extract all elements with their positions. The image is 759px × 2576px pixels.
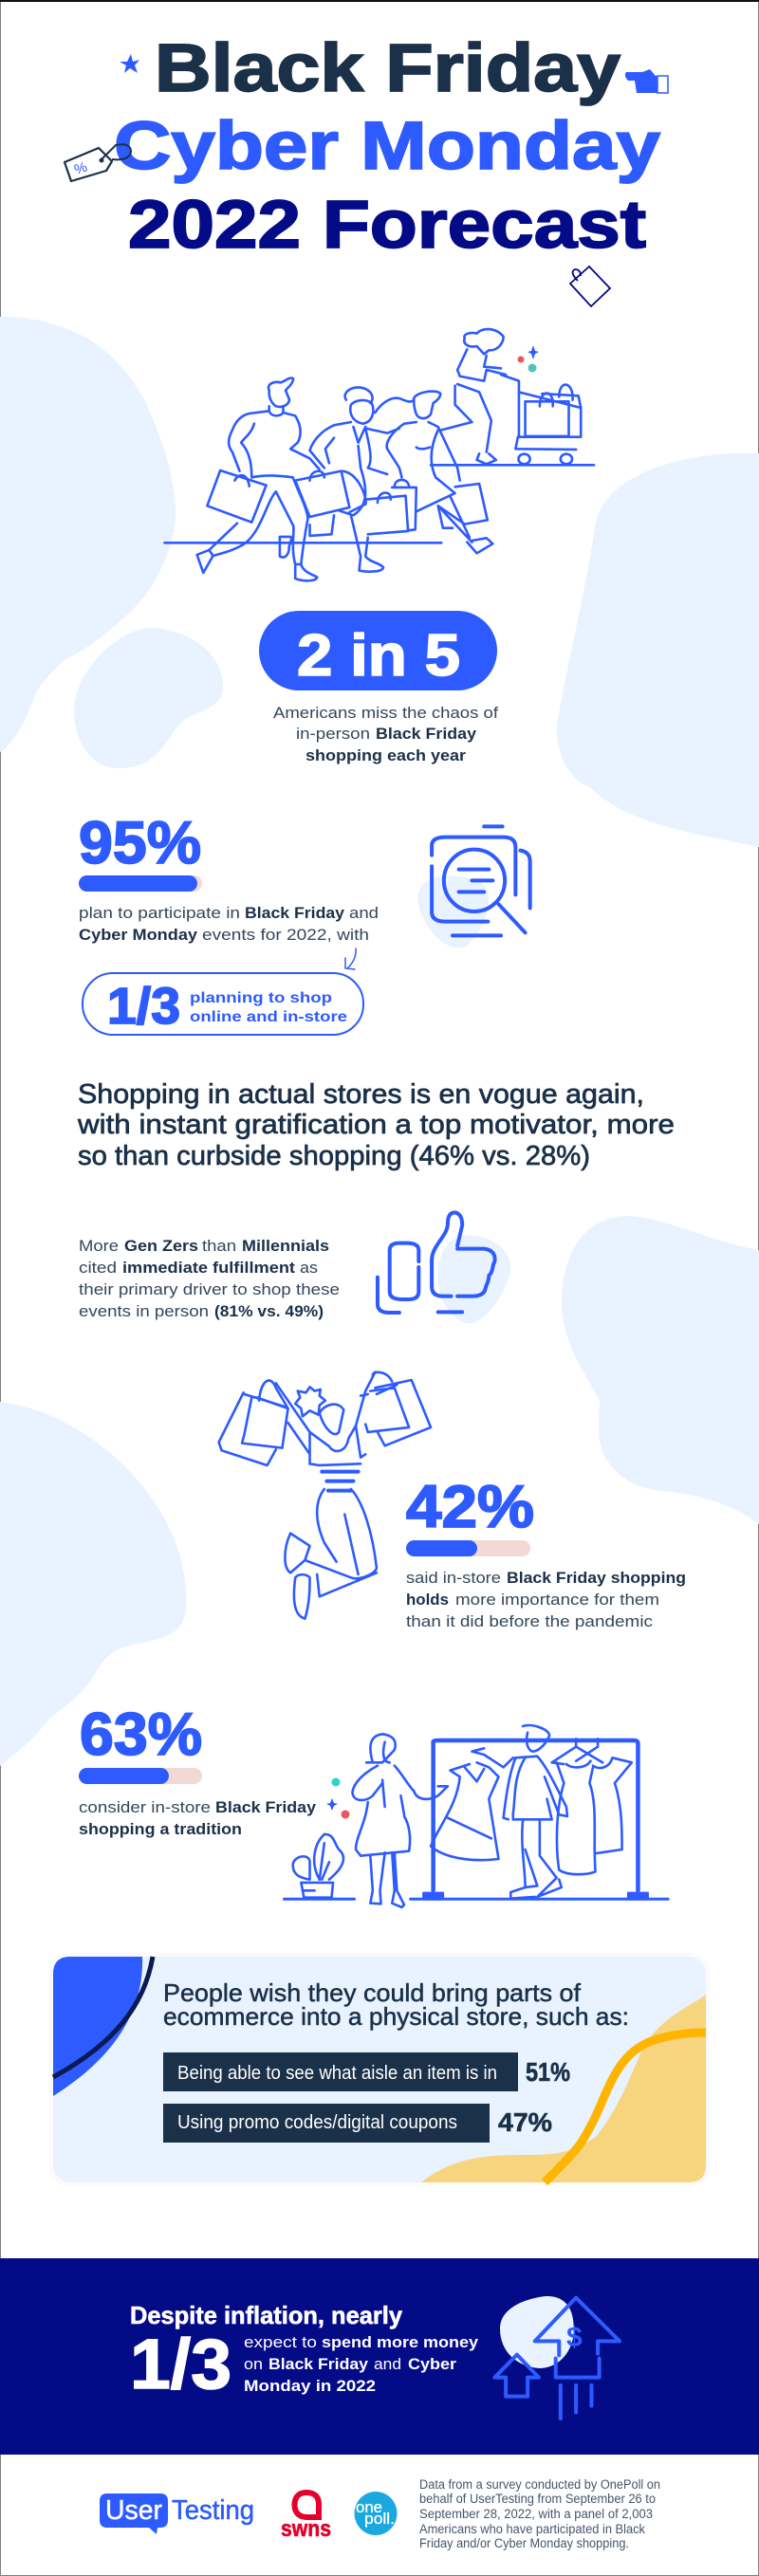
band text: on (244, 2355, 263, 2373)
text: Gen Zers: cited (79, 1259, 117, 1277)
panel corner: blue shape (53, 1957, 142, 2096)
heading: shopping in actual stores (77, 1079, 675, 1171)
text: said in-store: holds (406, 1591, 449, 1609)
bar: see what aisle 51%: Being able to see what aisle an item is in (177, 2063, 497, 2084)
arrow (345, 948, 356, 969)
logo: UserTesting (100, 2493, 254, 2534)
text: Gen Zers: their primary driver to shop these (79, 1280, 340, 1298)
stat pill: 2 in 5: 2 in 5 (297, 623, 460, 689)
text: Americans miss the chaos: in-person (296, 725, 370, 743)
bar: see what aisle 51% (163, 2052, 570, 2091)
title: Black Friday (155, 31, 621, 106)
text: Gen Zers: Millennials (242, 1237, 329, 1255)
stat: 95%: 95% (79, 810, 201, 876)
illustration: shoppers running (164, 329, 594, 580)
band text: Monday in 2022 (244, 2377, 376, 2395)
text: Americans miss the chaos: shopping each year (305, 746, 466, 764)
title: Cyber Monday (114, 109, 661, 184)
text: plan to participate (79, 904, 379, 944)
band text: Black Friday (268, 2355, 369, 2373)
illustration: jumping shopper (219, 1372, 431, 1619)
icon: thumbs up (378, 1212, 510, 1324)
text: survey methodology (419, 2477, 660, 2550)
text: plan to participate: Black Friday (245, 904, 345, 922)
text: survey methodology: Friday and/or Cyber Monday shopping. (419, 2536, 629, 2550)
callout pill: 1/3 planning: planning to shop (190, 990, 332, 1006)
bar: promo codes 47%: 47% (498, 2107, 552, 2137)
icon: rising arrows with dollar: $ (566, 2322, 583, 2353)
background blob: lower left (0, 1402, 186, 1766)
icon: rising arrows with dollar (494, 2296, 620, 2419)
text: said in-store (406, 1569, 686, 1630)
text: plan to participate: and (349, 904, 379, 922)
band text: spend more money (322, 2333, 479, 2351)
text: Gen Zers: as (300, 1259, 318, 1277)
progress bar: 42% (406, 1540, 530, 1556)
text: Americans miss the chaos: Americans miss the chaos of (273, 704, 498, 722)
logo: UserTesting: Testing (172, 2495, 254, 2526)
text: Gen Zers: than (202, 1237, 236, 1255)
background blob: middle right (562, 1216, 759, 1524)
callout pill: 1/3 planning: 1/3 (107, 978, 180, 1035)
bar: promo codes 47%: Using promo codes/digital coupons (177, 2112, 457, 2133)
stat: 42%: 42% (406, 1474, 534, 1540)
background blob: small left (74, 628, 223, 768)
text: Gen Zers (79, 1237, 340, 1320)
band: despite inflation (0, 2258, 759, 2455)
text: said in-store: said in-store (406, 1569, 501, 1587)
callout pill: 1/3 planning: online and in-store (190, 1009, 347, 1025)
panel heading: People wish they could bring parts of (163, 1978, 582, 2007)
text: consider in-store: consider in-store (79, 1798, 211, 1816)
text: consider in-store: shopping a tradition (79, 1820, 242, 1838)
sparkles near rack (326, 1777, 349, 1819)
text: plan to participate: plan to participate in (79, 904, 240, 922)
text: survey methodology: behalf of UserTesting from September 26 to (419, 2492, 656, 2506)
logo: one poll (355, 2492, 397, 2535)
logo: swns: swns (281, 2516, 331, 2542)
title: 2022 Forecast (128, 188, 646, 263)
stat pill: 2 in 5 (259, 611, 497, 690)
progress bar: 63% (79, 1768, 202, 1784)
text: survey methodology: Americans who have participated in Black (419, 2522, 645, 2536)
panel heading (163, 1978, 629, 2031)
band text (244, 2333, 479, 2395)
band text: and (374, 2355, 401, 2373)
background blob: top right (557, 453, 759, 847)
heading: shopping in actual stores: Shopping in actual stores is en vogue again, (78, 1079, 644, 1110)
text: said in-store: Black Friday shopping (507, 1569, 686, 1587)
text: survey methodology: Data from a survey conducted by OnePoll on (419, 2477, 660, 2492)
band text: Cyber (408, 2355, 456, 2373)
text: Gen Zers: (81% vs. 49%) (214, 1302, 324, 1320)
panel: ecommerce in physical store (49, 1953, 710, 2186)
sparkles near cart (518, 345, 539, 372)
stat: 63%: 63% (80, 1702, 202, 1768)
text: consider in-store (79, 1798, 317, 1838)
illustration: clothes rack (284, 1725, 668, 1907)
band stat: 1/3: 1/3 (130, 2325, 231, 2403)
heading: shopping in actual stores: so than curbside shopping (46% vs. 28%) (78, 1141, 590, 1171)
text: Gen Zers: Gen Zers (124, 1237, 198, 1255)
icon: small tag (570, 267, 610, 306)
text: Gen Zers: events in person (79, 1302, 209, 1320)
text: consider in-store: Black Friday (215, 1798, 317, 1816)
icon: phone magnifier (417, 826, 530, 948)
logo: swns (281, 2493, 331, 2542)
icon: percent price tag: % (72, 159, 89, 178)
band heading: Despite inflation, nearly (130, 2301, 403, 2329)
progress bar: 95% (79, 875, 202, 892)
panel corner: yellow shape (421, 1995, 706, 2182)
background blob: top left (0, 317, 176, 752)
logo: one poll: one (356, 2498, 382, 2516)
title (114, 31, 661, 263)
text: Gen Zers: More (79, 1237, 119, 1255)
logo: one poll: poll. (364, 2510, 395, 2528)
text: Americans miss the chaos: Black Friday (376, 725, 477, 743)
text: survey methodology: September 28, 2022, with a panel of 2,003 (419, 2507, 653, 2521)
logo: UserTesting: User (105, 2495, 162, 2526)
panel corner: navy curve (53, 1957, 153, 2077)
text: plan to participate: Cyber Monday (79, 926, 198, 944)
text: said in-store: more importance for them (455, 1591, 659, 1609)
icon: star (120, 54, 139, 73)
callout pill: 1/3 planning (83, 973, 363, 1035)
text: said in-store: than it did before the pandemic (406, 1612, 654, 1630)
heading: shopping in actual stores: with instant gratification a top motivator, more (77, 1110, 675, 1140)
text: Americans miss the chaos (273, 704, 498, 764)
bar: see what aisle 51%: 51% (526, 2057, 570, 2087)
icon: percent price tag (65, 144, 131, 181)
text: Gen Zers: immediate fulfillment (122, 1259, 295, 1277)
panel heading: ecommerce into a physical store, such as: (163, 2002, 629, 2031)
text: plan to participate: events for 2022, with (202, 926, 369, 944)
band text: expect to (244, 2333, 317, 2351)
bar: promo codes 47% (163, 2104, 552, 2143)
panel corner: orange curve (545, 2033, 706, 2182)
icon: pointing hand (625, 69, 668, 93)
